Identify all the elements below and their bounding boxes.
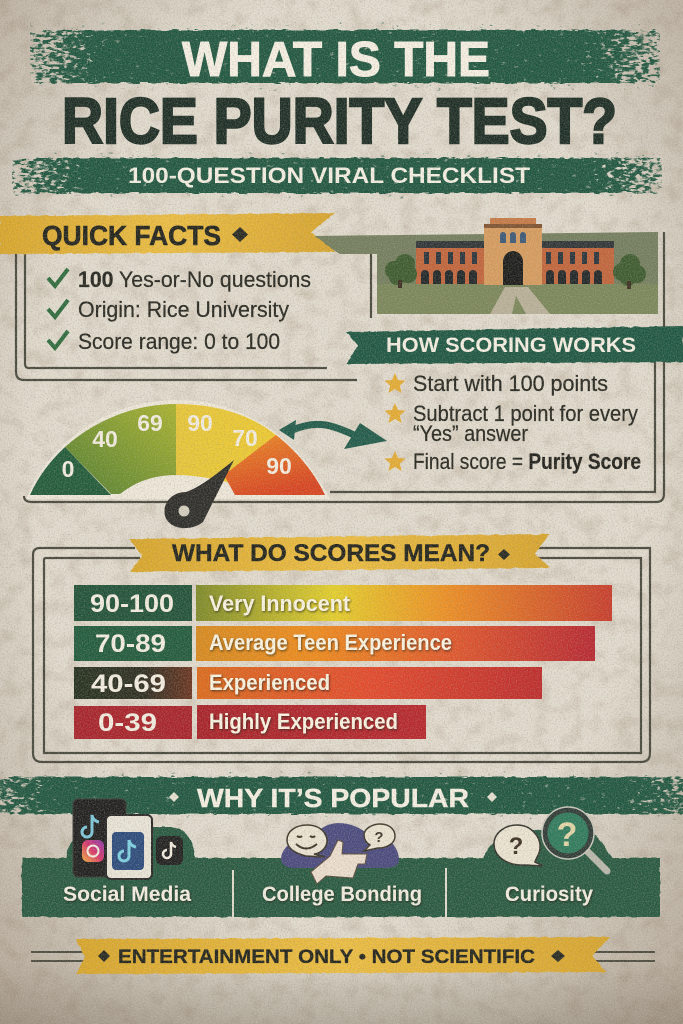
item: curiosity bbox=[494, 807, 607, 906]
row: 0-39: 0-39 bbox=[98, 709, 157, 737]
step: final score: Final score = Purity Score bbox=[413, 449, 641, 474]
gauge labels: 40 bbox=[92, 426, 118, 452]
diamond icon bbox=[498, 549, 510, 560]
gauge segment: 40 to 69 bbox=[65, 404, 176, 494]
label: curiosity: Curiosity bbox=[505, 883, 593, 906]
row: 90-100: 90-100 bbox=[90, 590, 174, 618]
gauge backing bbox=[26, 400, 330, 499]
popular card background bbox=[22, 827, 660, 917]
diamonds bbox=[98, 950, 565, 962]
panel: how scoring works bbox=[24, 232, 683, 502]
step: start: Start with 100 points bbox=[413, 371, 608, 396]
fact: questions: 100 Yes-or-No questions bbox=[78, 267, 311, 292]
scoring frame bbox=[24, 232, 664, 502]
fact: origin: Origin: Rice University bbox=[78, 297, 289, 322]
gauge segment: 0 bbox=[30, 447, 111, 495]
title block bbox=[12, 30, 662, 193]
side lines bbox=[31, 952, 655, 961]
quick facts banner bbox=[0, 213, 335, 254]
scores heading: WHAT DO SCORES MEAN? bbox=[172, 540, 490, 567]
row: 90-100: Very Innocent bbox=[209, 591, 351, 616]
scoring heading: HOW SCORING WORKS bbox=[386, 334, 636, 357]
diamond icon bbox=[232, 227, 248, 242]
ribbon bbox=[76, 937, 610, 974]
row: 70-89 bbox=[74, 626, 595, 661]
gauge labels: 0 bbox=[62, 456, 74, 482]
row: 90-100 bbox=[74, 585, 612, 621]
row: 0-39 bbox=[74, 705, 426, 739]
icon: chat and thumbs up: ? bbox=[374, 829, 384, 846]
disclaimer text: ENTERTAINMENT ONLY • NOT SCIENTIFIC bbox=[118, 947, 535, 968]
scores frame bbox=[33, 548, 650, 762]
panel: why it's popular bbox=[0, 777, 683, 918]
panel: what do scores mean bbox=[33, 534, 650, 762]
fact: score range: Score range: 0 to 100 bbox=[78, 329, 280, 354]
step: subtract bbox=[384, 401, 638, 446]
item: social media bbox=[63, 799, 191, 906]
gauge labels: 90 bbox=[266, 453, 292, 479]
title band bbox=[30, 30, 660, 83]
scoring banner bbox=[346, 326, 683, 364]
gauge labels bbox=[62, 410, 292, 482]
title line: rice purity test: RICE PURITY TEST? bbox=[62, 85, 617, 157]
dividers bbox=[233, 868, 446, 918]
subtitle band bbox=[12, 158, 662, 193]
row: 70-89: Average Teen Experience bbox=[209, 630, 452, 655]
heading diamonds bbox=[169, 792, 497, 802]
arrow: gauge to scoring bbox=[279, 420, 387, 449]
row: 40-69: Experienced bbox=[209, 670, 330, 695]
row: 40-69: 40-69 bbox=[91, 670, 166, 698]
quick facts heading: QUICK FACTS bbox=[42, 220, 221, 251]
gauge labels: 90 bbox=[187, 410, 213, 436]
row: 70-89: 70-89 bbox=[95, 630, 166, 658]
panel: quick facts bbox=[0, 213, 658, 380]
icon: speech bubble and magnifier: ? bbox=[557, 816, 577, 854]
item: college bonding bbox=[262, 823, 422, 906]
subtitle: 100-QUESTION VIRAL CHECKLIST bbox=[128, 163, 531, 188]
gauge labels: 69 bbox=[137, 410, 163, 436]
label: college bonding: College Bonding bbox=[262, 883, 422, 906]
label: social media: Social Media bbox=[63, 883, 191, 906]
disclaimer banner bbox=[31, 937, 655, 974]
popular heading: WHY IT’S POPULAR bbox=[197, 783, 469, 813]
icon: phones bbox=[73, 799, 183, 879]
icon: chat and thumbs up bbox=[281, 823, 399, 884]
scores banner bbox=[130, 534, 550, 572]
step: subtract: Subtract 1 point for every bbox=[413, 401, 638, 426]
gauge bbox=[26, 400, 330, 528]
quick facts frame bbox=[16, 248, 371, 380]
gauge labels: 70 bbox=[232, 425, 258, 451]
icon: speech bubble and magnifier: ? bbox=[509, 833, 523, 860]
step: subtract: “Yes” answer bbox=[413, 421, 528, 446]
title line: what is the: WHAT IS THE bbox=[182, 33, 490, 87]
campus illustration bbox=[311, 218, 658, 314]
popular band bbox=[0, 777, 683, 814]
row: 0-39: Highly Experienced bbox=[209, 709, 398, 734]
icon: speech bubble and magnifier bbox=[494, 807, 607, 871]
gauge segment: 90 bbox=[224, 435, 325, 495]
gauge needle bbox=[164, 460, 234, 528]
gauge segment: 90 to 70 bbox=[176, 404, 276, 483]
row: 40-69 bbox=[74, 667, 542, 699]
